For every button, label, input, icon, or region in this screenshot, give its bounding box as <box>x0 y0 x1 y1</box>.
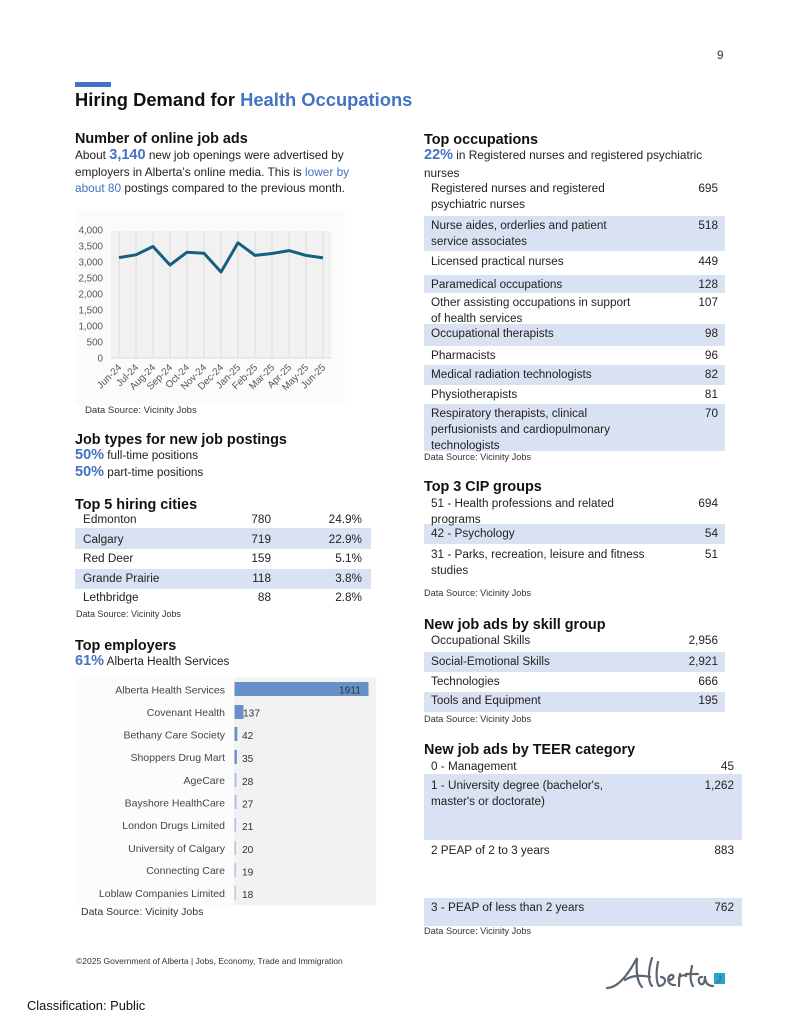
line chart: online job ads: 1,500 <box>78 306 104 316</box>
table: CIP groups: 31 - Parks, recreation, leisure and fitness <box>431 548 645 561</box>
line chart: online job ads: 0 <box>98 354 104 364</box>
bar chart: top employers: Bayshore HealthCare <box>125 798 225 810</box>
table: TEER: 1 - University degree (bachelor's, <box>431 779 603 792</box>
table: top occupations: 81 <box>705 388 718 401</box>
table: top occupations: Occupational therapists <box>431 327 554 340</box>
line chart: online job ads: 500 <box>87 338 104 348</box>
table: top occupations: 70 <box>705 407 718 420</box>
line chart: online job ads: Feb-25 <box>230 362 261 392</box>
table: skill groups: Social-Emotional Skills <box>431 655 550 668</box>
bar chart: top employers <box>99 678 376 905</box>
table: top occupations: 695 <box>698 182 718 195</box>
bar chart: top employers: 35 <box>242 754 254 765</box>
text: top employer: 61% Alberta Health Services <box>75 653 229 669</box>
table: top occupations: service associates <box>431 235 527 248</box>
heading: top employers: Top employers <box>75 638 176 654</box>
bar chart: top employers: Covenant Health <box>147 707 225 719</box>
bar chart: top employers: Loblaw Companies Limited <box>99 888 225 900</box>
table: hiring cities: 5.1% <box>335 552 362 565</box>
table: skill groups <box>424 634 725 712</box>
table: TEER: 2 PEAP of 2 to 3 years <box>431 844 550 857</box>
bar chart: top employers: Bethany Care Society <box>123 730 226 742</box>
table: hiring cities: 24.9% <box>329 513 362 526</box>
table: TEER: 45 <box>721 760 734 773</box>
table: top occupations: 96 <box>705 349 718 362</box>
table: hiring cities: 118 <box>252 572 271 585</box>
line chart: online job ads: Mar-25 <box>247 362 278 392</box>
table: top occupations: Respiratory therapists, clinical <box>431 407 587 420</box>
table: TEER: 0 - Management <box>431 760 517 773</box>
bar chart: top employers: 21 <box>242 822 254 833</box>
title: Hiring Demand for Health Occupations <box>75 89 412 110</box>
bar chart: top employers: 1911 <box>339 686 361 696</box>
text: job ads summary: about 80 postings compared to the previous month. <box>75 181 345 195</box>
table: hiring cities: 719 <box>251 533 271 546</box>
table: CIP groups: 54 <box>705 527 718 540</box>
table: CIP groups: 51 <box>705 548 718 561</box>
table: CIP groups: programs <box>431 513 481 526</box>
line chart: online job ads: 2,500 <box>78 274 104 284</box>
table: top occupations: Paramedical occupations <box>431 278 562 291</box>
table: TEER: 1,262 <box>705 779 734 792</box>
line chart: online job ads: May-25 <box>280 362 312 393</box>
source: employers: Data Source: Vicinity Jobs <box>81 906 203 918</box>
line chart: online job ads: Nov-24 <box>179 362 210 392</box>
table: CIP groups <box>424 497 725 577</box>
accent bar <box>75 82 111 87</box>
source: cities: Data Source: Vicinity Jobs <box>76 609 181 619</box>
table: skill groups: 2,921 <box>689 655 718 668</box>
table: TEER: master's or doctorate) <box>431 795 545 808</box>
bar chart: top employers: 27 <box>242 800 254 810</box>
bar chart: top employers: 137 <box>243 708 260 720</box>
table: hiring cities: Edmonton <box>83 513 137 526</box>
line chart: online job ads: 3,000 <box>78 258 104 268</box>
heading: top 3 CIP groups: Top 3 CIP groups <box>424 479 542 495</box>
text: job ads summary: employers in Alberta’s online media. This is lower by <box>75 164 349 178</box>
table: skill groups: 195 <box>698 694 718 707</box>
bar chart: top employers: 20 <box>242 845 254 856</box>
table: hiring cities: 3.8% <box>335 572 362 585</box>
source: occupations: Data Source: Vicinity Jobs <box>424 452 531 462</box>
bar chart: top employers: Alberta Health Services <box>115 684 225 696</box>
table: hiring cities: 159 <box>251 552 271 565</box>
text: top occupation share: nurses <box>424 166 459 180</box>
text: job types values: 50% part-time positions <box>75 464 203 480</box>
table: CIP groups: 42 - Psychology <box>431 527 515 540</box>
line chart: online job ads: Jun-24 <box>95 362 125 391</box>
table: hiring cities: Lethbridge <box>83 591 139 604</box>
table: top occupations: 518 <box>698 219 718 232</box>
table: top occupations: 128 <box>698 278 718 291</box>
bar chart: top employers: Shoppers Drug Mart <box>130 752 225 764</box>
table: top occupations: psychiatric nurses <box>431 198 525 211</box>
table: hiring cities: 22.9% <box>329 533 362 546</box>
line chart: online job ads: Jun-25 <box>299 362 329 391</box>
bar chart: top employers: 28 <box>242 777 254 788</box>
table: hiring cities: 780 <box>251 513 271 526</box>
table: top occupations: technologists <box>431 439 500 452</box>
source: skills: Data Source: Vicinity Jobs <box>424 714 531 724</box>
table: top occupations <box>424 182 725 452</box>
bar chart: top employers: London Drugs Limited <box>122 820 225 832</box>
text: top occupation share: 22% in Registered nurses and registered psychiatric <box>424 147 702 163</box>
table: top occupations: 98 <box>705 327 718 340</box>
table: hiring cities: 2.8% <box>335 591 362 604</box>
line chart: online job ads: Sep-24 <box>145 362 176 392</box>
text: job ads summary <box>75 147 349 195</box>
line chart: online job ads: Oct-24 <box>164 362 193 391</box>
footer: copyright: ©2025 Government of Alberta | Jobs, Economy, Trade and Immigration <box>76 956 343 966</box>
table: top occupations: Physiotherapists <box>431 388 517 401</box>
text: top occupation share <box>424 147 702 180</box>
heading: TEER category: New job ads by TEER category <box>424 742 635 758</box>
line chart: online job ads: Aug-24 <box>128 362 159 392</box>
bar chart: top employers: 18 <box>242 890 254 901</box>
table: top occupations: of health services <box>431 312 522 325</box>
table: top occupations: Pharmacists <box>431 349 496 362</box>
text: job ads summary: About 3,140 new job openings were advertised by <box>75 147 344 163</box>
table: TEER: 883 <box>714 844 734 857</box>
line chart: online job ads: Jul-24 <box>114 362 142 389</box>
table: skill groups: Tools and Equipment <box>431 694 541 707</box>
bar chart: top employers: AgeCare <box>184 775 225 787</box>
table: skill groups: 666 <box>698 675 718 688</box>
source: TEER: Data Source: Vicinity Jobs <box>424 926 531 936</box>
table: CIP groups: 51 - Health professions and related <box>431 497 614 510</box>
table: top occupations: 107 <box>698 296 718 309</box>
heading: skill group: New job ads by skill group <box>424 617 606 633</box>
line chart: online job ads: Apr-25 <box>266 362 295 391</box>
table: skill groups: Occupational Skills <box>431 634 530 647</box>
table: hiring cities: 88 <box>258 591 271 604</box>
footer: classification: Classification: Public <box>27 998 145 1013</box>
table: top occupations: Other assisting occupations in support <box>431 296 630 309</box>
table: top occupations: 82 <box>705 368 718 381</box>
table: skill groups: Technologies <box>431 675 500 688</box>
table: hiring cities: Grande Prairie <box>83 572 159 585</box>
heading: top 5 hiring cities: Top 5 hiring cities <box>75 497 197 513</box>
table: top occupations: 449 <box>698 255 718 268</box>
source: chart: Data Source: Vicinity Jobs <box>85 405 197 416</box>
line chart: online job ads: 1,000 <box>78 322 104 332</box>
bar chart: top employers: 42 <box>242 731 254 742</box>
table: hiring cities: Calgary <box>83 533 124 546</box>
table: TEER <box>424 760 742 926</box>
table: skill groups: 2,956 <box>689 634 718 647</box>
heading: number of online job ads: Number of online job ads <box>75 131 248 147</box>
table: top occupations: Licensed practical nurses <box>431 255 564 268</box>
source: CIP: Data Source: Vicinity Jobs <box>424 588 531 598</box>
heading: job types: Job types for new job postings <box>75 432 287 448</box>
table: hiring cities <box>75 513 371 604</box>
line chart: online job ads: 4,000 <box>78 226 104 236</box>
line chart: online job ads: 3,500 <box>78 242 104 252</box>
heading: top occupations: Top occupations <box>424 132 538 148</box>
line chart: online job ads: Jan-25 <box>214 362 244 391</box>
table: top occupations: Medical radiation technologists <box>431 368 592 381</box>
table: hiring cities: Red Deer <box>83 552 133 565</box>
bar chart: top employers: 19 <box>242 868 254 878</box>
table: top occupations: Nurse aides, orderlies and patient <box>431 219 607 232</box>
icon: Alberta logo <box>606 956 725 990</box>
page number: 9 <box>717 49 724 62</box>
table: TEER: 762 <box>714 901 734 914</box>
line chart: online job ads: Dec-24 <box>196 362 227 392</box>
table: CIP groups: 694 <box>698 497 718 510</box>
table: TEER: 3 - PEAP of less than 2 years <box>431 901 584 914</box>
line chart: online job ads: 2,000 <box>78 290 104 300</box>
table: CIP groups: studies <box>431 564 468 577</box>
table: top occupations: perfusionists and cardiopulmonary <box>431 423 610 436</box>
line chart: online job ads <box>78 226 331 393</box>
bar chart: top employers: University of Calgary <box>128 843 226 855</box>
text: job types values: 50% full-time positions <box>75 447 198 463</box>
bar chart: top employers: Connecting Care <box>146 865 225 877</box>
table: top occupations: Registered nurses and registered <box>431 182 605 195</box>
text: job types values <box>75 447 203 480</box>
